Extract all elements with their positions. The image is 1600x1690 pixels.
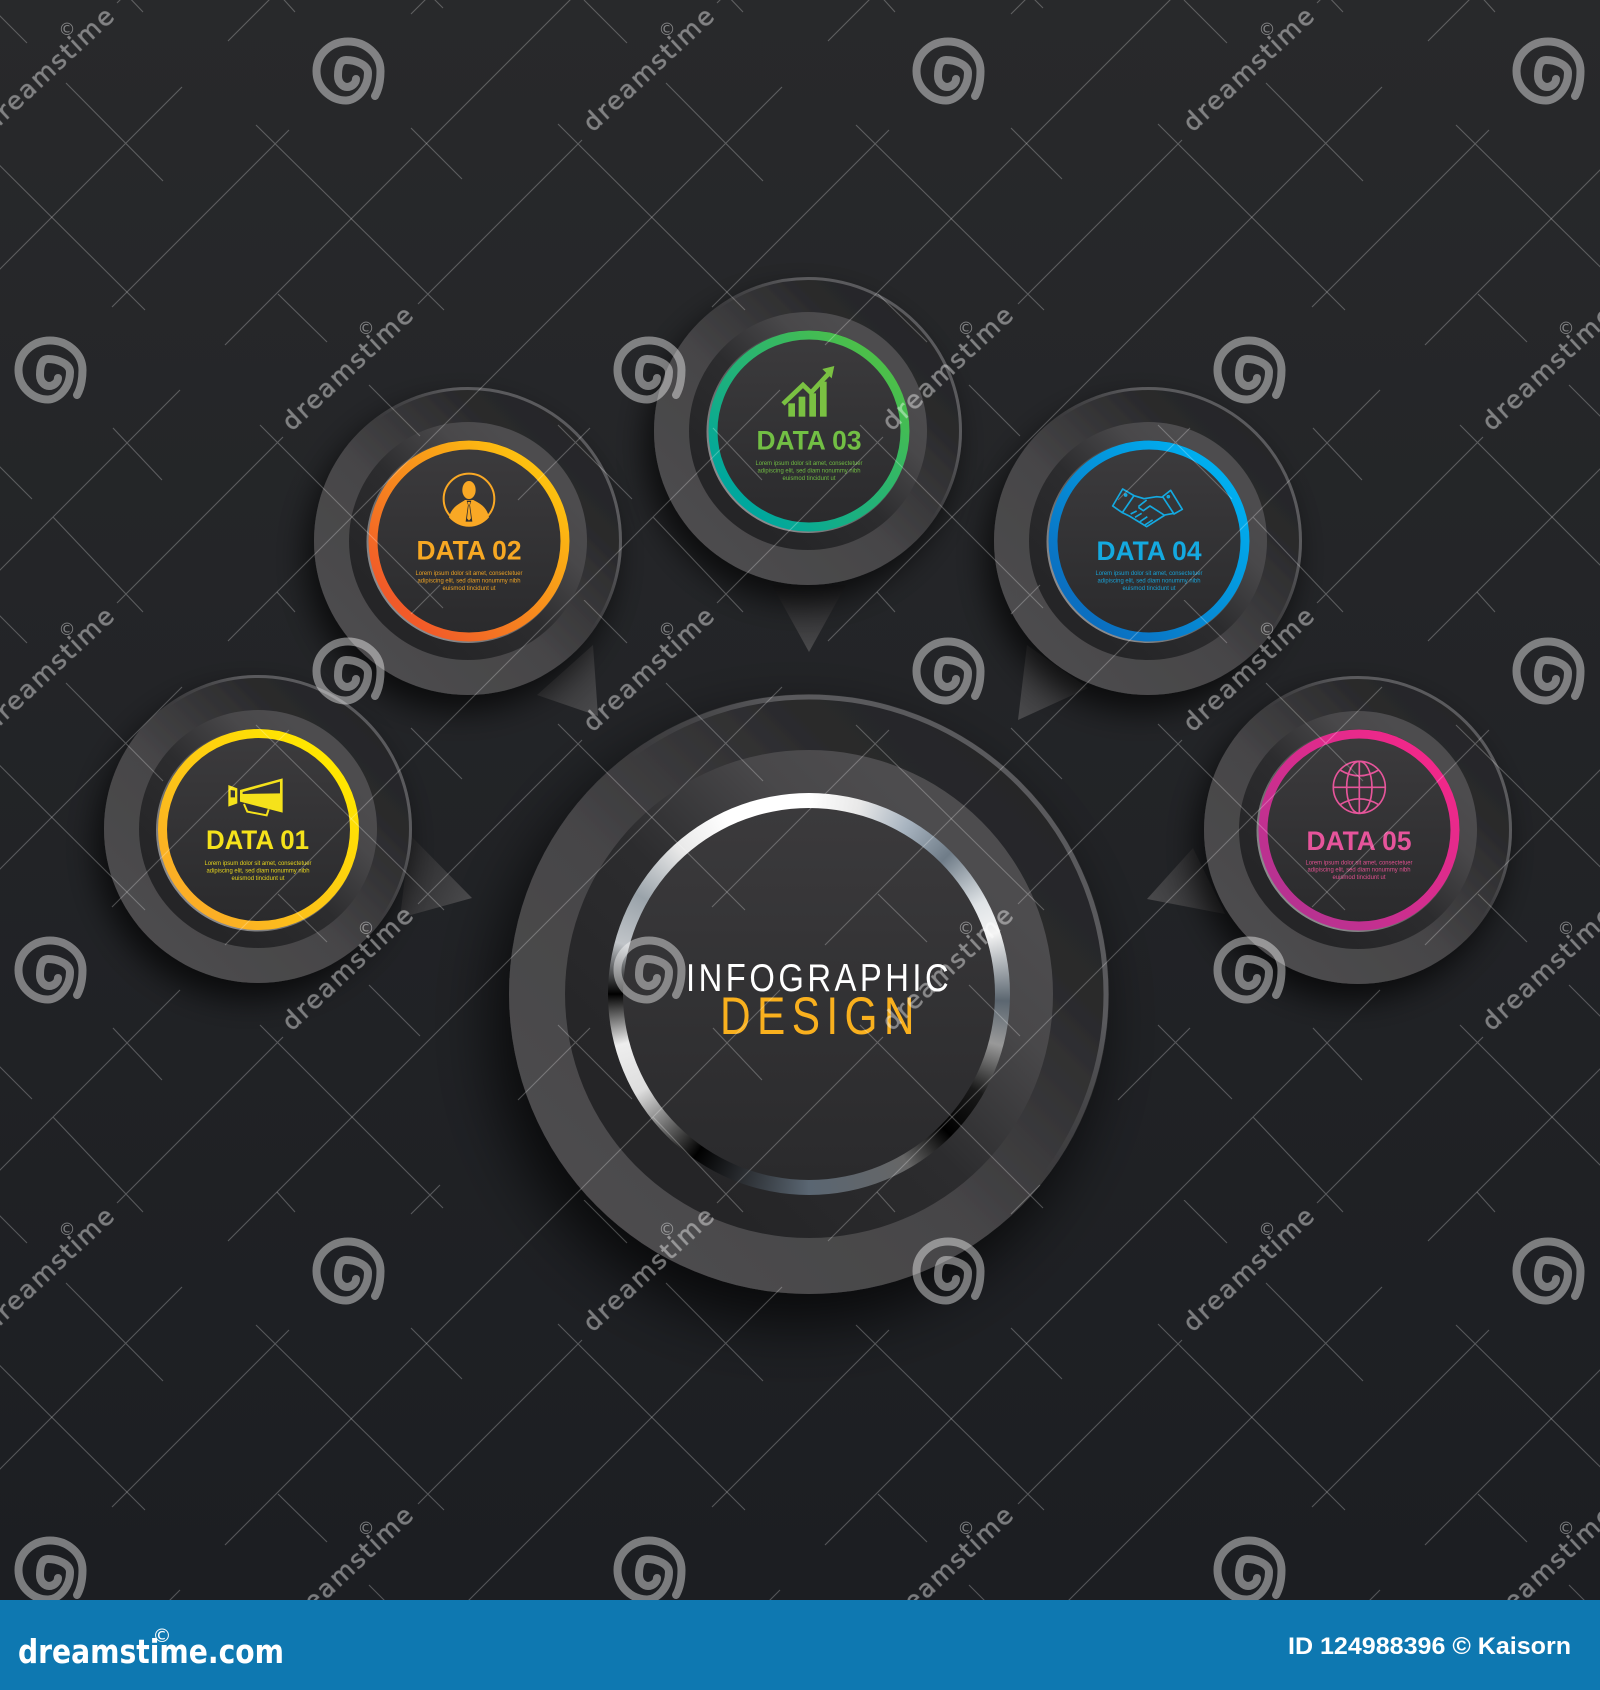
body text: adipiscing elit, sed diam nonummy nibh xyxy=(758,468,861,474)
body text: adipiscing elit, sed diam nonummy nibh xyxy=(1098,578,1201,584)
silver ring with central disc xyxy=(608,793,1010,1195)
watermark: dreamstime wordmarks: © xyxy=(958,919,974,939)
body text: euismod tincidunt ut xyxy=(1122,585,1176,592)
watermark: dreamstime wordmarks: © xyxy=(658,20,676,40)
watermark: dreamstime wordmarks: © xyxy=(58,620,76,640)
watermark: dreamstime wordmarks: dreamstime xyxy=(876,900,1019,1036)
watermark: dreamstime wordmarks: dreamstime xyxy=(276,1500,419,1636)
body text: Lorem ipsum dolor sit amet, consectetuer xyxy=(416,570,523,577)
watermark: dreamstime wordmarks: dreamstime xyxy=(876,300,1019,436)
icon: growth chart xyxy=(783,366,834,417)
body text xyxy=(1306,860,1413,881)
icon: businessman xyxy=(444,474,494,527)
watermark: dreamstime wordmarks: dreamstime xyxy=(577,1,720,137)
heading: DATA 04: DATA 04 xyxy=(1096,536,1202,566)
watermark: dreamstime wordmarks: dreamstime xyxy=(276,900,419,1036)
body text xyxy=(204,860,312,882)
body text: euismod tincidunt ut xyxy=(442,585,496,592)
body text xyxy=(1096,570,1203,592)
icon: handshake xyxy=(1113,489,1182,527)
watermark: dreamstime wordmarks: © xyxy=(58,1220,76,1240)
footer logo: © xyxy=(152,1625,172,1647)
watermark: dreamstime wordmarks: dreamstime xyxy=(276,300,419,436)
watermark: dreamstime wordmarks: © xyxy=(358,319,374,339)
body text: Lorem ipsum dolor sit amet, consectetuer xyxy=(204,860,312,867)
badge: DATA 02 xyxy=(314,387,622,716)
badge: DATA 03 xyxy=(654,277,962,652)
watermark: dreamstime wordmarks: dreamstime xyxy=(577,1201,720,1337)
body text: euismod tincidunt ut xyxy=(232,875,285,882)
body text: euismod tincidunt ut xyxy=(1332,874,1386,881)
watermark: dreamstime wordmarks: © xyxy=(958,319,974,339)
badge: DATA 05 xyxy=(1147,676,1512,984)
footer logo: dreamstime.com xyxy=(18,1632,284,1671)
heading: DATA 03: DATA 03 xyxy=(756,426,862,456)
watermark: dreamstime wordmarks: © xyxy=(1258,1220,1276,1240)
heading: DATA 02: DATA 02 xyxy=(416,536,522,566)
body text xyxy=(756,460,863,482)
watermark: dreamstime wordmarks: © xyxy=(58,20,76,40)
watermark: dreamstime wordmarks: © xyxy=(1258,20,1276,40)
body text: Lorem ipsum dolor sit amet, consectetuer xyxy=(1306,860,1413,866)
footer credit: ID 124988396 © Kaisorn xyxy=(1288,1633,1571,1660)
icon: megaphone xyxy=(228,778,283,815)
central disc: outer and middle bands xyxy=(509,694,1109,1294)
watermark: dreamstime wordmarks: dreamstime xyxy=(1177,1,1320,137)
heading: DATA 05: DATA 05 xyxy=(1306,826,1412,856)
body text: adipiscing elit, sed diam nonummy nibh xyxy=(206,868,310,874)
body text: Lorem ipsum dolor sit amet, consectetuer xyxy=(756,460,863,467)
watermark: dreamstime wordmarks: dreamstime xyxy=(1177,1201,1320,1337)
body text: adipiscing elit, sed diam nonummy nibh xyxy=(1308,866,1411,874)
watermark: dreamstime wordmarks: © xyxy=(1558,319,1574,339)
body text xyxy=(416,570,523,592)
body text: Lorem ipsum dolor sit amet, consectetuer xyxy=(1096,570,1203,577)
central title xyxy=(686,955,952,1046)
watermark: dreamstime wordmarks: © xyxy=(958,1519,974,1539)
badge: DATA 04 xyxy=(994,387,1302,720)
watermark: dreamstime wordmarks: © xyxy=(1258,620,1276,640)
central title: DESIGN xyxy=(720,988,921,1046)
central title: INFOGRAPHIC xyxy=(686,955,952,1000)
watermark: dreamstime wordmarks: dreamstime xyxy=(1177,601,1320,737)
icon: globe xyxy=(1333,761,1385,813)
watermark: dreamstime wordmarks: © xyxy=(658,620,676,640)
badge: DATA 01 xyxy=(104,675,472,983)
watermark: dreamstime wordmarks: © xyxy=(1558,1519,1574,1539)
watermark: dreamstime wordmarks: © xyxy=(358,919,374,939)
footer bar xyxy=(0,1600,1600,1690)
watermark: dreamstime wordmarks: © xyxy=(358,1519,374,1539)
watermark: dreamstime wordmarks: dreamstime xyxy=(876,1500,1019,1636)
watermark: dreamstime wordmarks: © xyxy=(658,1220,676,1240)
heading: DATA 01: DATA 01 xyxy=(206,825,309,855)
watermark: dreamstime wordmarks: dreamstime xyxy=(577,601,720,737)
body text: adipiscing elit, sed diam nonummy nibh xyxy=(418,578,521,584)
body text: euismod tincidunt ut xyxy=(782,475,836,482)
watermark: dreamstime wordmarks: © xyxy=(1558,919,1574,939)
